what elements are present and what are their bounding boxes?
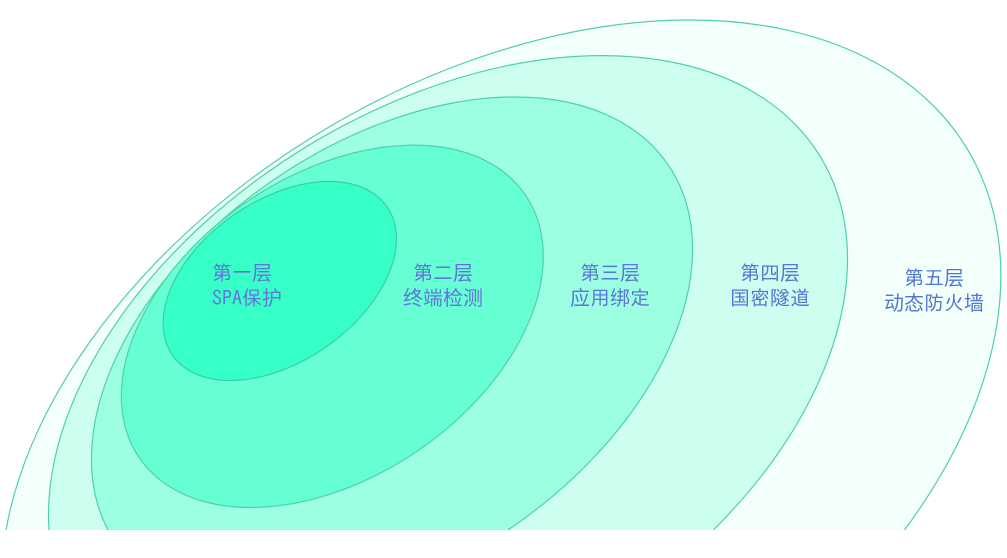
label: layer 2 [403,263,483,308]
label: layer 1: SPA保护 [212,288,282,308]
label: layer 4: 国密隧道 [730,288,810,308]
layer 3 outline [91,97,693,530]
label: layer 4 [730,263,810,308]
label: layer 2: 终端检测 [403,288,483,308]
label: layer 1 [212,263,282,308]
layer 1 ellipse [127,141,433,421]
label: layer 3: 应用绑定 [570,288,650,308]
layer 4 ellipse [49,56,848,530]
label: layer 5 [884,268,984,313]
label: layer 1: 第一层 [212,263,272,283]
layer 2 ellipse [54,70,610,558]
layer 3 ellipse [91,97,693,530]
label: layer 4: 第四层 [740,263,800,283]
label: layer 2: 第二层 [413,263,473,283]
label: layer 5: 动态防火墙 [884,293,984,313]
label: layer 3: 第三层 [580,263,640,283]
label: layer 5: 第五层 [904,268,964,288]
layer 4 outline [49,56,848,530]
label: layer 3 [570,263,650,308]
